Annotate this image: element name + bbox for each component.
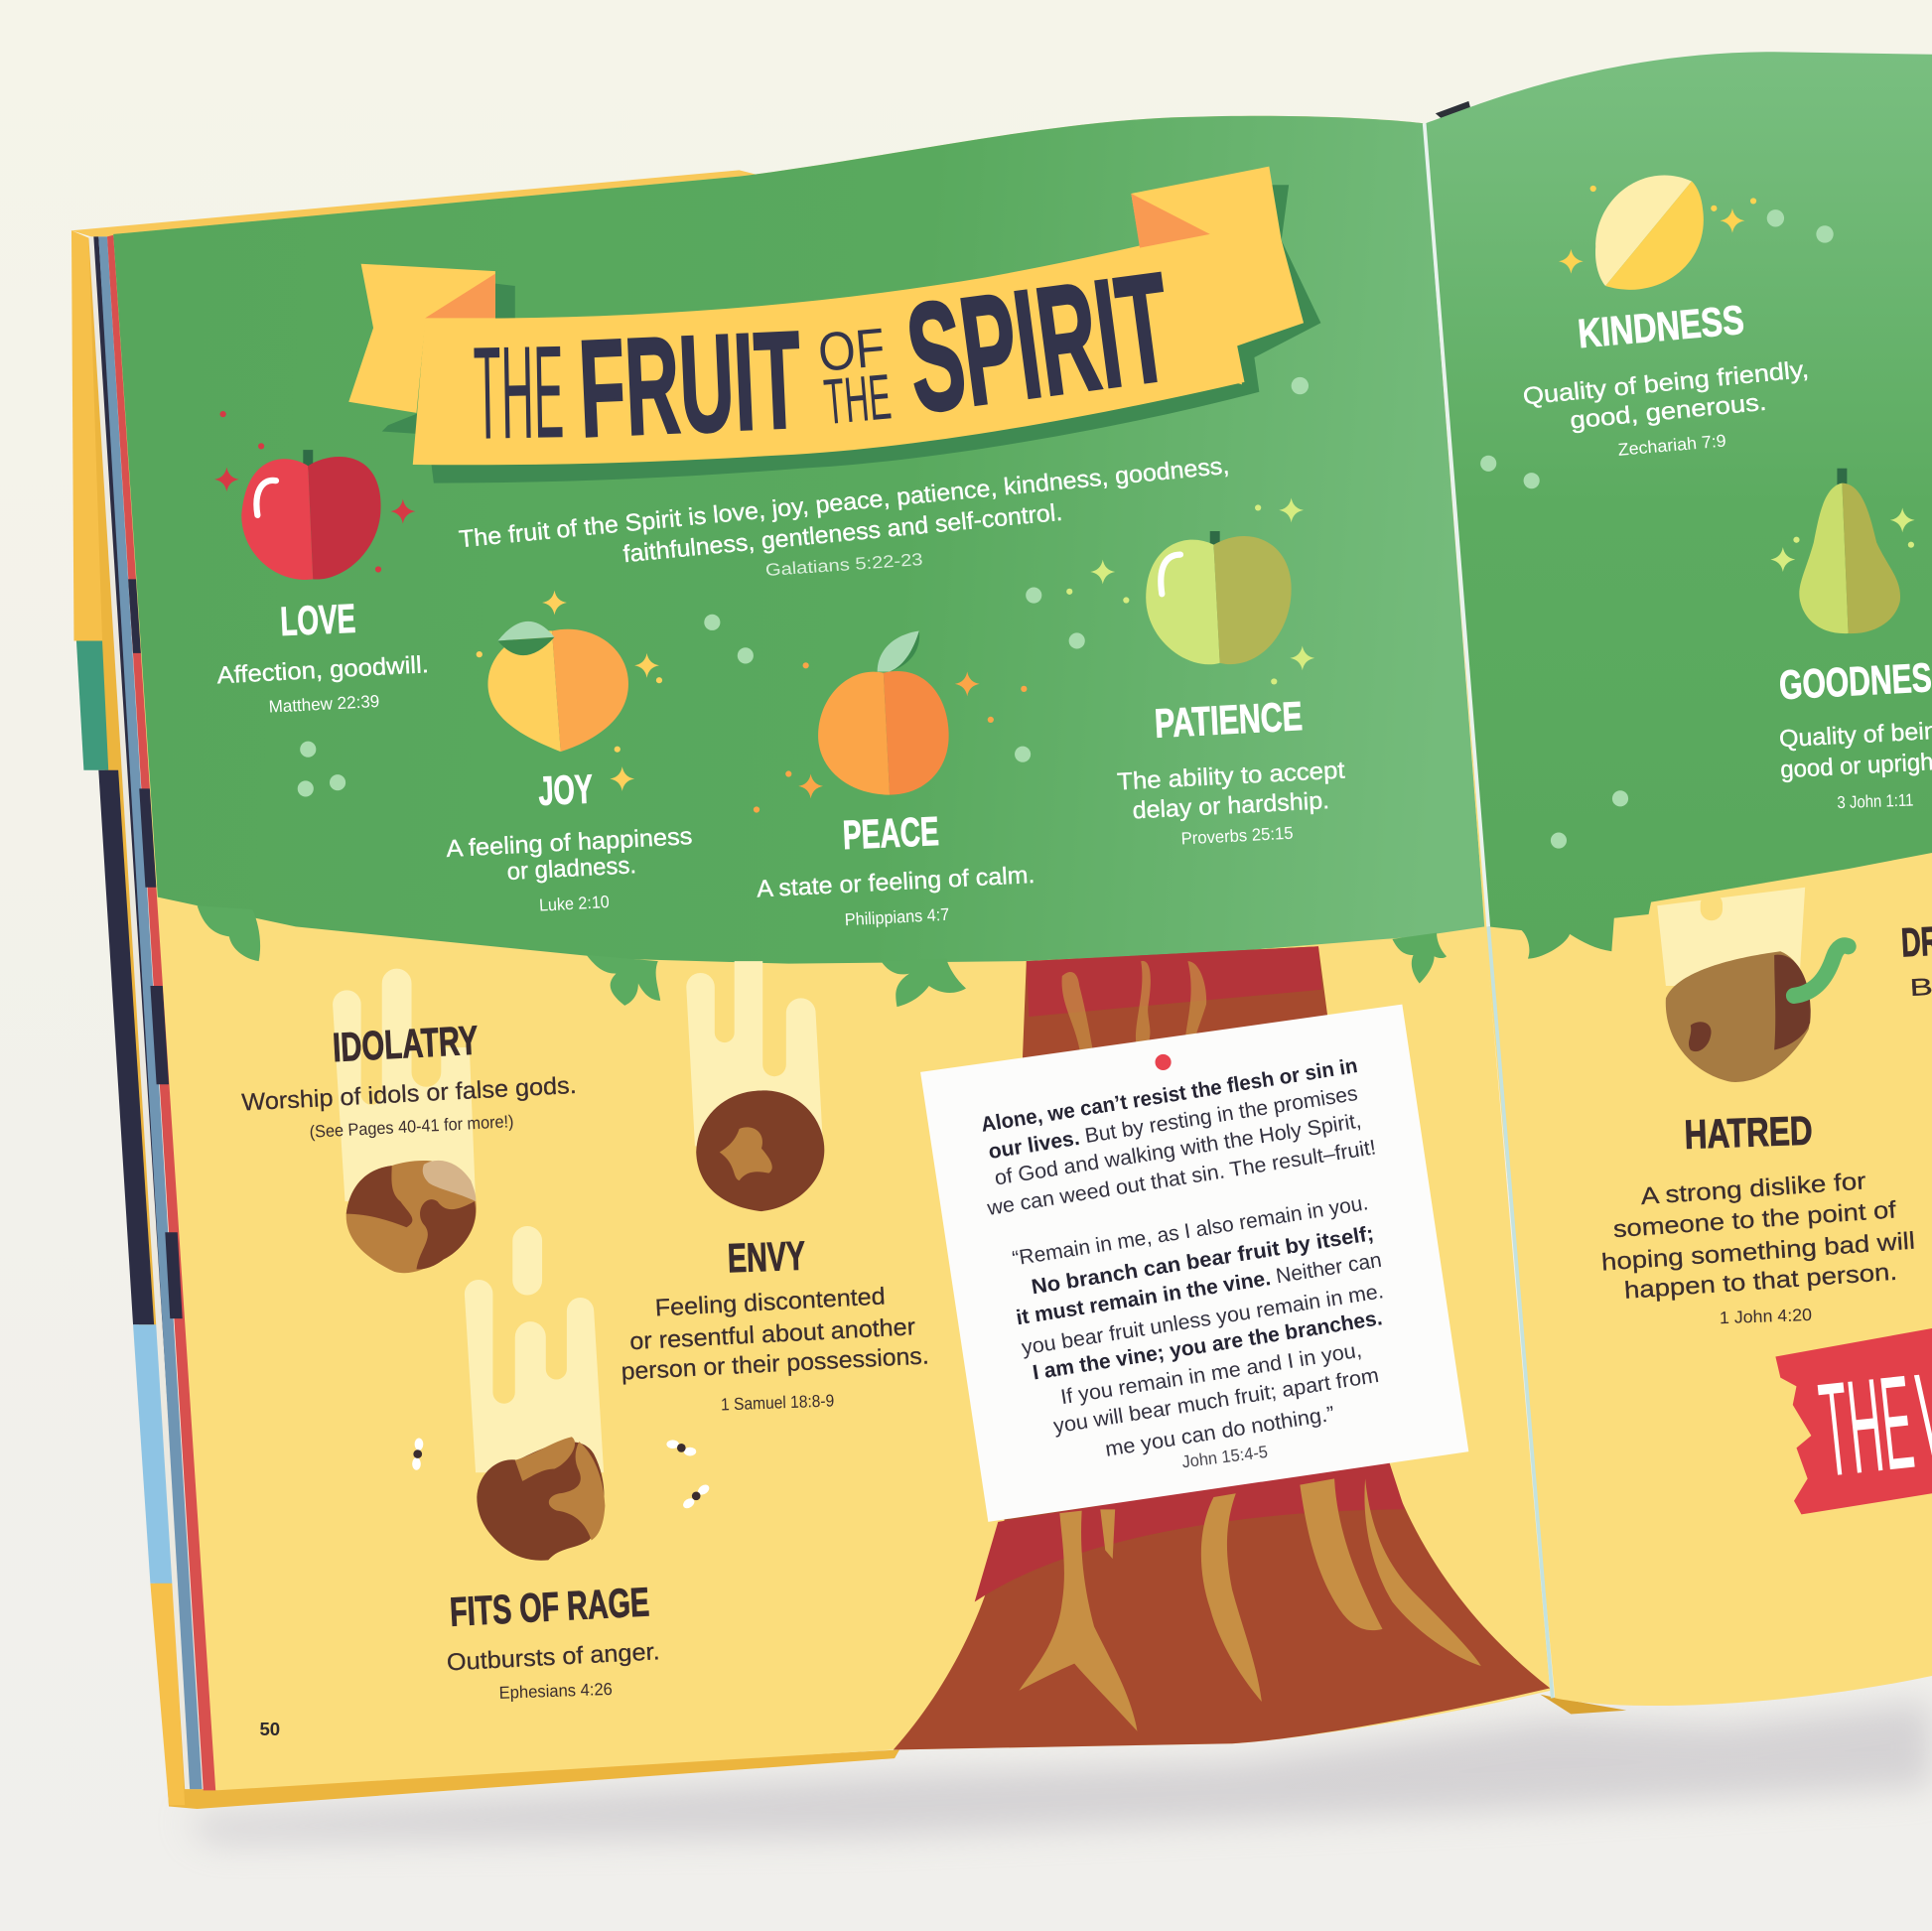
text: patience: delay or hardship.	[1132, 787, 1330, 824]
heading: joy: JOY	[537, 765, 594, 814]
text: fits of rage	[446, 1638, 660, 1703]
title text	[473, 240, 1179, 468]
left green canopy	[113, 116, 1484, 1007]
heading: love: LOVE	[279, 596, 356, 644]
text: idolatry: Worship of idols or false gods.	[241, 1072, 577, 1117]
text: patience: Proverbs 25:15	[1180, 823, 1294, 849]
card verse: If you remain in me and I in you,	[1059, 1339, 1363, 1409]
card verse: John 15:4-5	[1180, 1442, 1269, 1471]
heading: kindness: KINDNESS	[1577, 297, 1745, 356]
falling trail: idolatry	[333, 969, 476, 1201]
heading: fits of rage: FITS OF RAGE	[449, 1579, 650, 1635]
text: envy: or resentful about another	[629, 1313, 916, 1355]
fruit: orange (peace)	[754, 631, 1027, 813]
text: peace: Philippians 4:7	[844, 904, 950, 929]
banner left tail	[348, 264, 495, 413]
title text: FRUIT	[576, 303, 804, 467]
card paragraph: our lives. But by resting in the promises	[987, 1082, 1359, 1164]
text: envy: Feeling discontented	[654, 1283, 886, 1321]
text: hatred: happen to that person.	[1623, 1259, 1898, 1305]
card verse: me you can do nothing.”	[1104, 1403, 1336, 1461]
text: kindness: Zechariah 7:9	[1617, 430, 1726, 460]
fruit: lemon (kindness)	[1559, 176, 1756, 290]
text: envy	[621, 1283, 929, 1414]
rock: fits of rage	[477, 1437, 605, 1561]
text: hatred: someone to the point of	[1612, 1196, 1897, 1243]
title banner	[348, 167, 1320, 483]
text: joy: or gladness.	[506, 852, 637, 886]
intro verse: The fruit of the Spirit is love, joy, peace, patience, kindness, goodness,	[458, 453, 1230, 553]
text: fits of rage: Outbursts of anger.	[446, 1638, 660, 1676]
flies	[412, 1438, 711, 1510]
text: peace	[757, 862, 1035, 929]
card verse: it must remain in the vine. Neither can	[1015, 1249, 1383, 1329]
text: goodness	[1778, 717, 1932, 812]
title text: THE	[821, 360, 894, 438]
text: idolatry: (See Pages 40-41 for more!)	[309, 1111, 514, 1142]
falling trail: fits of rage	[465, 1226, 604, 1472]
card paragraph	[980, 1054, 1378, 1220]
right page trail notch	[1701, 894, 1723, 920]
fruit: peach (joy)	[477, 591, 662, 791]
text: envy: 1 Samuel 18:8-9	[721, 1390, 835, 1414]
fruit: pear (goodness)	[1770, 469, 1915, 633]
right green canopy	[1426, 52, 1932, 959]
text: fits of rage: Ephesians 4:26	[498, 1679, 613, 1703]
text: hatred: hoping something bad will	[1600, 1228, 1916, 1277]
card verse: you will bear much fruit; apart from	[1051, 1364, 1380, 1438]
heading: envy: ENVY	[727, 1233, 806, 1281]
text: goodness: 3 John 1:11	[1837, 789, 1914, 812]
card verse: No branch can bear fruit by itself;	[1030, 1222, 1375, 1299]
text: idolatry	[241, 1072, 577, 1142]
title text: THE	[473, 319, 565, 468]
gutter line	[1425, 123, 1553, 1698]
page edge stack	[71, 230, 216, 1805]
heading: peace: PEACE	[842, 808, 940, 858]
card paragraph: of God and walking with the Holy Spirit,	[993, 1109, 1363, 1190]
book cover edge	[71, 101, 1626, 1809]
text: hatred: 1 John 4:20	[1720, 1305, 1812, 1327]
banner folds	[425, 274, 495, 318]
heading: hatred: HATRED	[1684, 1107, 1813, 1158]
fruit: apple (love)	[214, 411, 415, 580]
text: love: Matthew 22:39	[268, 691, 380, 717]
bark lines	[1019, 961, 1481, 1731]
title text: OF	[816, 317, 888, 383]
intro verse: Galatians 5:22-23	[764, 549, 923, 580]
rock with worm: hatred	[1666, 945, 1849, 1082]
text: peace: A state or feeling of calm.	[757, 862, 1035, 903]
title text: SPIRIT	[898, 240, 1179, 445]
text: joy: A feeling of happiness	[446, 823, 693, 863]
text: kindness	[1522, 356, 1810, 460]
red dot	[1156, 1054, 1172, 1070]
left page	[113, 116, 1550, 1790]
text: patience	[1116, 757, 1345, 849]
card paragraph: Alone, we can’t resist the flesh or sin in	[980, 1054, 1359, 1137]
heading: patience: PATIENCE	[1154, 693, 1304, 747]
background dots	[298, 209, 1834, 849]
text: patience: The ability to accept	[1116, 757, 1345, 795]
text: hatred: A strong dislike for	[1640, 1168, 1866, 1210]
heading: idolatry: IDOLATRY	[332, 1018, 480, 1070]
banner shadow	[382, 185, 1320, 483]
right page	[1426, 123, 1932, 1706]
card paragraph: we can weed out that sin. The result–fruit!	[985, 1136, 1378, 1220]
intro verse: faithfulness, gentleness and self-control.	[621, 499, 1063, 568]
text: hatred	[1600, 1168, 1916, 1327]
rock: idolatry	[346, 1161, 477, 1273]
card verse: “Remain in me, as I also remain in you.	[1011, 1191, 1370, 1271]
text: love	[216, 651, 429, 717]
book shadow	[185, 1701, 1932, 1843]
card verse: I am the vine; you are the branches.	[1032, 1307, 1384, 1385]
text: envy: person or their possessions.	[621, 1342, 929, 1386]
falling trail: envy	[686, 961, 823, 1146]
banner main	[413, 228, 1244, 465]
text: kindness: Quality of being friendly,	[1522, 356, 1810, 410]
text: joy	[446, 823, 693, 915]
canopy leaves	[198, 905, 1447, 1007]
fruit: green apple (patience)	[1066, 498, 1314, 685]
rock: envy	[696, 1090, 824, 1211]
falling trail: hatred	[1657, 888, 1805, 986]
text: joy: Luke 2:10	[538, 892, 610, 915]
card verse	[1011, 1191, 1385, 1471]
text: kindness: good, generous.	[1569, 389, 1768, 435]
card verse: you bear fruit unless you remain in me.	[1020, 1280, 1385, 1359]
white scripture card	[920, 1005, 1468, 1522]
tree trunk	[894, 946, 1550, 1749]
page number: 50	[259, 1719, 280, 1739]
banner right tail	[1131, 167, 1304, 384]
worm	[1794, 945, 1849, 996]
sparkles	[214, 411, 415, 573]
text: love: Affection, goodwill.	[216, 651, 429, 689]
